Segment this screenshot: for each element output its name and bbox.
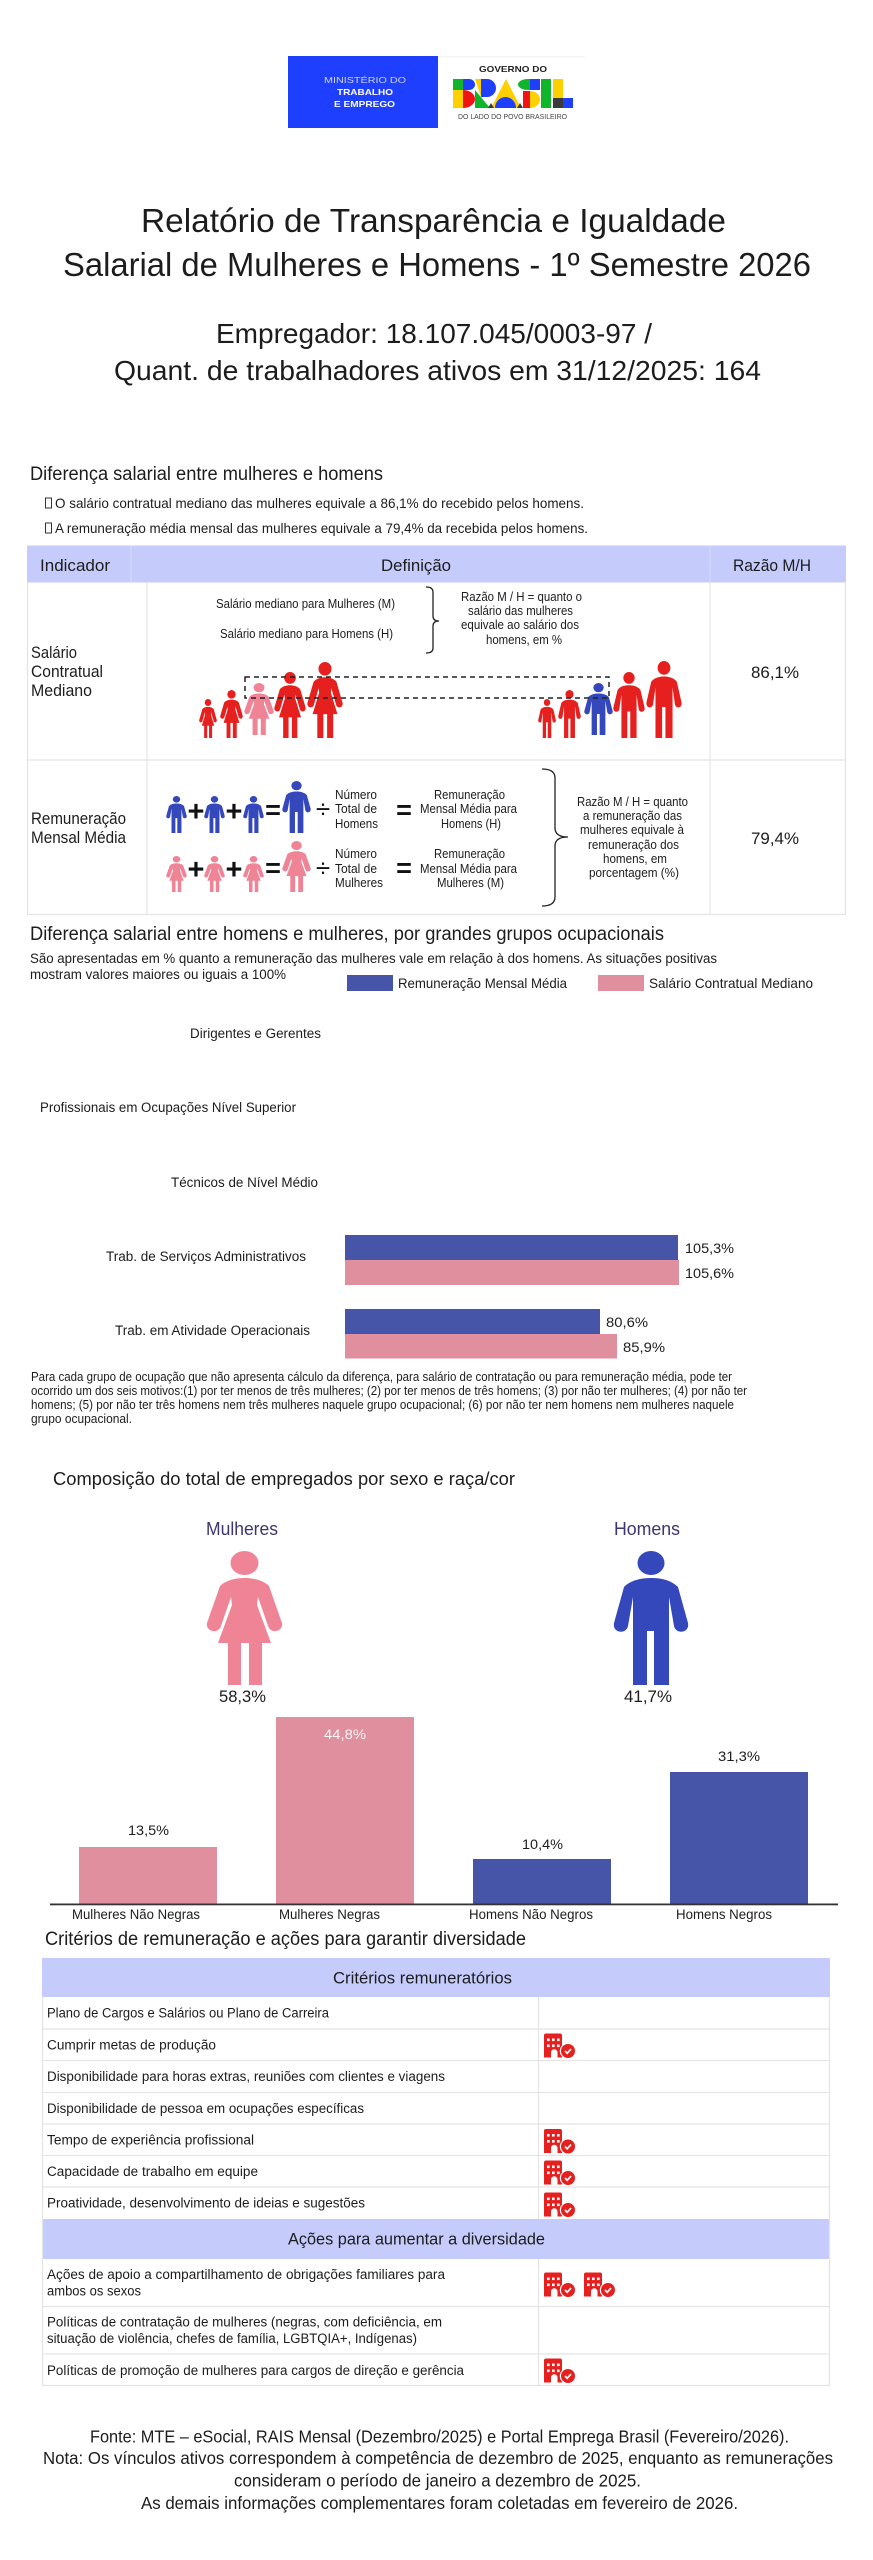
legend: Salário Contratual Mediano <box>649 975 813 991</box>
column: Mulheres Negras: 44,8% <box>324 1727 366 1742</box>
footer: source and notes: consideram o período de janeiro a dezembro de 2025. <box>234 2470 641 2490</box>
footer: source and notes: As demais informações complementares foram coletadas em fevereiro de 2026. <box>141 2493 738 2513</box>
logo: Ministério do Trabalho e Emprego: TRABALHO <box>337 87 393 97</box>
column: Homens Negros: 31,3% <box>718 1749 760 1764</box>
logo: Ministério do Trabalho e Emprego: MINISTÉRIO DO <box>324 75 406 85</box>
occupational footnote: Para cada grupo de ocupação que não apresenta cálculo da diferença, para salário de contratação ou para remuneração média, pode ter <box>31 1370 732 1384</box>
definition text: median salary: Salário mediano para Mulheres (M) <box>216 597 395 611</box>
title: Salarial de Mulheres e Homens - 1º Semestre 2026 <box>63 246 811 283</box>
occupational intro text: mostram valores maiores ou iguais a 100% <box>30 967 286 982</box>
bars: administrative services: 105,6% <box>685 1266 734 1281</box>
ratio explanation: median salary: homens, em % <box>486 633 562 647</box>
footer: source and notes: Fonte: MTE – eSocial, RAIS Mensal (Dezembro/2025) e Portal Emprega Brasil (Fevereiro/2026). <box>90 2426 789 2446</box>
dashed median connector <box>245 677 609 698</box>
action rows: Políticas de contratação de mulheres (negras, com deficiência, em <box>47 2314 442 2330</box>
ratio explanation: mean pay <box>577 795 688 880</box>
action rows: situação de violência, chefes de família, LGBTQIA+, Indígenas) <box>47 2331 417 2346</box>
section header: remuneration criteria: Critérios remuneratórios <box>333 1968 512 1988</box>
heading: pay gap: Diferença salarial entre mulheres e homens <box>30 464 383 485</box>
formula: men: Remuneração <box>434 788 505 802</box>
formula: women: = <box>396 853 412 883</box>
bars: operational activities <box>345 1309 665 1358</box>
row label: Remuneração Mensal Média <box>31 809 126 847</box>
table header <box>40 556 811 575</box>
row label: Salário Contratual Mediano: Mediano <box>31 681 92 700</box>
action rows: Políticas de promoção de mulheres para cargos de direção e gerência <box>47 2363 464 2378</box>
formula: men: Homens (H) <box>441 817 501 831</box>
row label: Remuneração Mensal Média: Mensal Média <box>31 828 126 847</box>
ratio explanation: mean pay: a remuneração das <box>583 809 682 823</box>
column: Mulheres Não Negras <box>72 1823 217 1922</box>
women share: Mulheres <box>206 1519 278 1539</box>
column: Homens Negros: Homens Negros <box>676 1907 772 1922</box>
column: Mulheres Negras <box>276 1717 414 1922</box>
formula: women: + <box>188 854 204 886</box>
occupational footnote: homens; (5) por não ter três homens nem três mulheres naquele grupo ocupacional; (6) por não ter nem homens nem mulheres naquele <box>31 1398 734 1412</box>
formula: women: + <box>226 854 242 886</box>
criterion rows: Tempo de experiência profissional <box>47 2132 254 2148</box>
table header: Definição <box>381 556 451 575</box>
legend: Remuneração Mensal Média <box>398 975 567 991</box>
employer subtitle <box>114 318 761 386</box>
heading: workforce composition: Composição do total de empregados por sexo e raça/cor <box>53 1468 515 1489</box>
row label: Remuneração Mensal Média: Remuneração <box>31 809 126 828</box>
ratio explanation: mean pay: mulheres equivale à <box>580 823 684 837</box>
legend <box>347 975 813 991</box>
men share: 41,7% <box>624 1687 672 1706</box>
formula: men: = <box>265 795 281 825</box>
table header: Indicador <box>40 556 110 575</box>
formula: men: ÷ <box>316 794 330 824</box>
occupational footnote: grupo ocupacional. <box>31 1412 132 1426</box>
formula: men <box>166 781 517 833</box>
women share <box>206 1519 282 1706</box>
formula: men: Mensal Média para <box>420 802 517 816</box>
ratio explanation: median salary: Razão M / H = quanto o <box>461 590 582 604</box>
title: Relatório de Transparência e Igualdade <box>141 202 726 239</box>
men share <box>614 1519 688 1706</box>
criterion rows: Disponibilidade para horas extras, reuniões com clientes e viagens <box>47 2069 445 2084</box>
category labels: Dirigentes e Gerentes <box>190 1026 321 1041</box>
logo: Ministério do Trabalho e Emprego: E EMPREGO <box>334 99 395 109</box>
footer: source and notes: Nota: Os vínculos ativos correspondem à competência de dezembro de 2025, enquanto as remunerações <box>43 2448 833 2468</box>
heading: criteria and actions: Critérios de remuneração e ações para garantir diversidade <box>45 1929 526 1950</box>
formula: women <box>166 841 517 892</box>
row label: Salário Contratual Mediano: Salário <box>31 643 77 662</box>
table: indicators <box>27 546 846 914</box>
formula: men: = <box>396 795 412 825</box>
column: Homens Negros <box>670 1749 808 1922</box>
row label: Salário Contratual Mediano: Contratual <box>31 662 103 681</box>
icon group: women ordered by salary <box>199 662 343 738</box>
row label: Salário Contratual Mediano <box>31 643 103 700</box>
summary bullets: O salário contratual mediano das mulheres equivale a 86,1% do recebido pelos homens. <box>55 495 584 511</box>
ratio explanation: mean pay: porcentagem (%) <box>589 866 679 880</box>
formula: men: Homens <box>335 817 378 831</box>
formula: men: + <box>188 796 204 828</box>
formula: women: Número <box>335 847 377 861</box>
logo: Governo do Brasil: GOVERNO DO <box>479 64 547 74</box>
column: Mulheres Não Negras: Mulheres Não Negras <box>72 1907 200 1922</box>
column: Mulheres Negras: Mulheres Negras <box>279 1907 380 1922</box>
column: Homens Não Negros: 10,4% <box>522 1837 563 1852</box>
footer: source and notes <box>43 2426 833 2513</box>
action rows <box>47 2267 464 2378</box>
value: 86,1%: 86,1% <box>751 663 799 682</box>
women share: 58,3% <box>219 1687 266 1706</box>
logo: Ministério do Trabalho e Emprego <box>288 56 438 128</box>
men share: Homens <box>614 1519 680 1539</box>
category labels: Trab. de Serviços Administrativos <box>106 1249 306 1264</box>
icon group: men ordered by salary <box>538 661 682 738</box>
occupational footnote <box>31 1370 747 1426</box>
icons: criteria adopted <box>544 2034 576 2218</box>
criterion rows: Plano de Cargos e Salários ou Plano de Carreira <box>47 2006 329 2020</box>
table header: Razão M/H <box>733 556 811 575</box>
bars: administrative services: 105,3% <box>685 1241 734 1256</box>
criterion rows: Disponibilidade de pessoa em ocupações específicas <box>47 2101 364 2116</box>
summary bullets: A remuneração média mensal das mulheres equivale a 79,4% da recebida pelos homens. <box>55 520 588 536</box>
formula: men: + <box>226 796 242 828</box>
column chart: sex and race <box>50 1717 838 1922</box>
formula: women: Mulheres <box>335 876 383 890</box>
bar chart: occupational groups <box>40 1026 734 1358</box>
bars: operational activities: 85,9% <box>623 1340 665 1355</box>
criterion rows <box>47 2006 445 2210</box>
brace: median salary <box>426 587 439 653</box>
criterion rows: Capacidade de trabalho em equipe <box>47 2164 258 2179</box>
formula: men: Número <box>335 788 377 802</box>
icons: actions adopted <box>544 2272 616 2384</box>
column: Mulheres Não Negras: 13,5% <box>128 1823 169 1838</box>
ratio explanation: median salary: equivale ao salário dos <box>461 618 579 632</box>
ratio explanation: mean pay: Razão M / H = quanto <box>577 795 688 809</box>
category labels: Técnicos de Nível Médio <box>171 1175 318 1190</box>
bars: administrative services <box>345 1235 734 1285</box>
employer subtitle: Empregador: 18.107.045/0003-97 / <box>216 318 652 349</box>
summary bullets <box>46 495 588 536</box>
title <box>63 202 811 283</box>
definition text: median salary <box>216 597 395 641</box>
criterion rows: Cumprir metas de produção <box>47 2038 216 2052</box>
value: 79,4%: 79,4% <box>751 829 799 848</box>
category labels: Trab. em Atividade Operacionais <box>115 1323 310 1338</box>
heading: occupational groups: Diferença salarial entre homens e mulheres, por grandes grupos ocupacionais <box>30 924 664 945</box>
formula: women: = <box>265 853 281 883</box>
ratio explanation: median salary: salário das mulheres <box>468 604 573 618</box>
occupational intro text: São apresentadas em % quanto a remuneração das mulheres vale em relação à dos homens. As situações positivas <box>30 951 717 966</box>
formula: women: Mulheres (M) <box>437 876 504 890</box>
ratio explanation: median salary <box>461 590 582 647</box>
occupational footnote: ocorrido um dos seis motivos:(1) por ter menos de três mulheres; (2) por ter menos de três homens; (3) por não ter mulheres; (4) por não ter <box>31 1384 747 1398</box>
brace: mean pay <box>542 769 568 906</box>
action rows: Ações de apoio a compartilhamento de obrigações familiares para <box>47 2267 445 2282</box>
formula: women: Mensal Média para <box>420 862 517 876</box>
occupational intro text <box>30 951 717 982</box>
column: Homens Não Negros: Homens Não Negros <box>469 1907 593 1922</box>
definition text: median salary: Salário mediano para Homens (H) <box>220 627 393 641</box>
formula: men: Total de <box>335 802 377 816</box>
category labels: Profissionais em Ocupações Nível Superior <box>40 1100 296 1115</box>
ratio explanation: mean pay: homens, em <box>603 852 667 866</box>
action rows: ambos os sexos <box>47 2284 141 2298</box>
formula: women: ÷ <box>316 853 330 883</box>
bars: operational activities: 80,6% <box>606 1315 648 1330</box>
category labels <box>40 1026 321 1338</box>
criterion rows: Proatividade, desenvolvimento de ideias e sugestões <box>47 2196 365 2210</box>
table: criteria and actions <box>42 1958 830 2386</box>
section header: diversity actions: Ações para aumentar a diversidade <box>288 2230 545 2248</box>
formula: women: Total de <box>335 862 377 876</box>
logo: Governo do Brasil <box>438 56 585 121</box>
employer subtitle: Quant. de trabalhadores ativos em 31/12/2025: 164 <box>114 355 761 386</box>
formula: women: Remuneração <box>434 847 505 861</box>
column: Homens Não Negros <box>469 1837 611 1922</box>
ratio explanation: mean pay: remuneração dos <box>588 838 679 852</box>
logo: Governo do Brasil: DO LADO DO POVO BRASILEIRO <box>458 114 568 121</box>
